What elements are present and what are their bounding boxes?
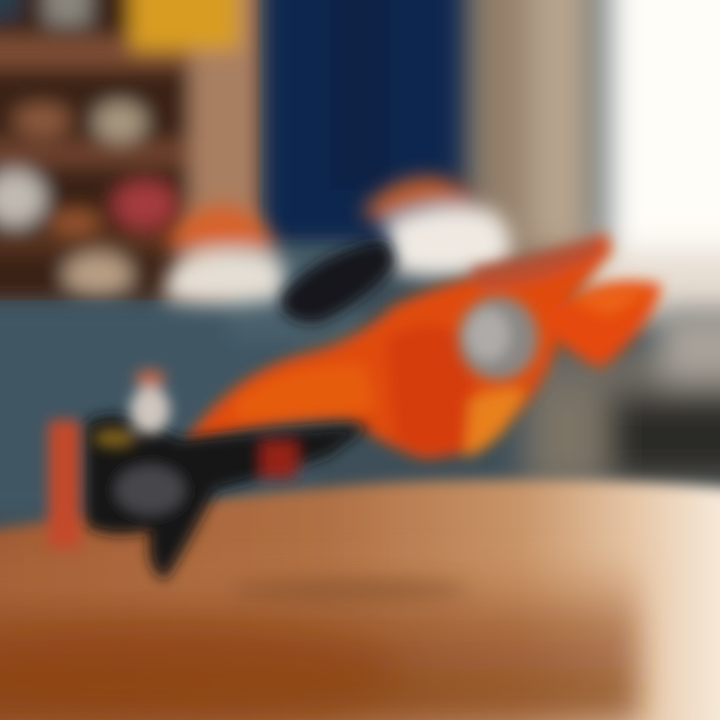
toy black lower body bbox=[85, 415, 370, 580]
bright window bbox=[580, 0, 720, 320]
white dome on the right bbox=[362, 177, 511, 277]
toy tail flare bbox=[545, 281, 662, 368]
blue-gray wall bbox=[0, 250, 360, 517]
wooden floor bbox=[0, 480, 720, 720]
toy black arm bbox=[282, 240, 395, 322]
background right dark area bbox=[520, 310, 720, 490]
toy body orange bbox=[185, 232, 612, 458]
bookshelf bbox=[0, 0, 262, 300]
white dome on the left bbox=[165, 205, 285, 305]
toy gray circle bbox=[458, 296, 538, 380]
navy curtain bbox=[266, 0, 470, 242]
beige curtain bbox=[470, 0, 595, 270]
toy red end block bbox=[48, 420, 80, 548]
toy white and yellow detail bbox=[93, 369, 170, 448]
